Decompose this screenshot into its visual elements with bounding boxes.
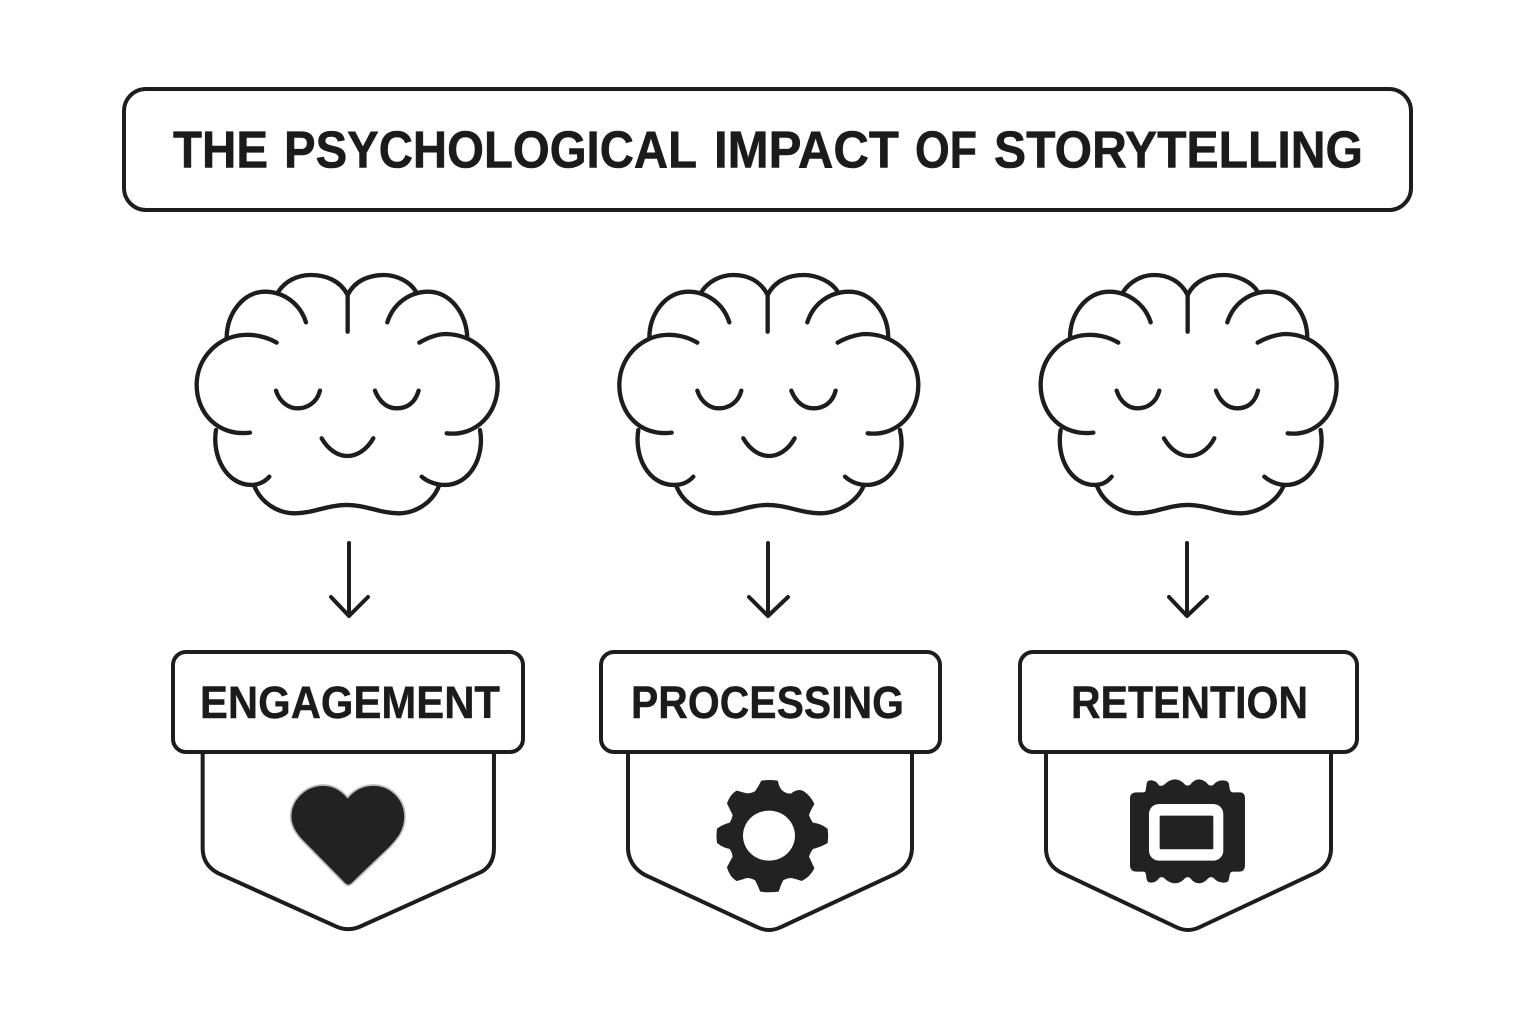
label: retention [1020,652,1357,752]
column: processing [601,275,940,930]
title: THE [173,122,268,180]
title: PSYCHOLOGICAL [284,122,697,180]
label: engagement [173,652,523,752]
title: IMPACT [714,122,899,180]
icon: heart [291,785,405,885]
icon: gear [717,781,827,892]
icon: brain with sleeping face (retention) [1041,275,1337,513]
icon: memory chip [1130,779,1245,883]
arrow: brain to processing [749,543,788,616]
badge shield: processing [628,753,912,930]
label: processing: PROCESSING [631,677,904,728]
column: engagement [173,275,523,929]
badge shield: retention [1046,753,1331,930]
icon: brain with sleeping face (processing) [619,275,918,513]
label: retention: RETENTION [1071,677,1308,728]
title: OF [915,122,977,180]
label: engagement: ENGAGEMENT [200,677,500,728]
label: processing [601,652,940,752]
icon: brain with sleeping face (engagement) [197,275,498,513]
badge shield: engagement [203,753,494,929]
arrow: brain to retention [1169,543,1207,616]
title [124,89,1411,210]
arrow: brain to engagement [331,543,368,616]
column: retention [1020,275,1357,930]
title: STORYTELLING [994,122,1363,180]
